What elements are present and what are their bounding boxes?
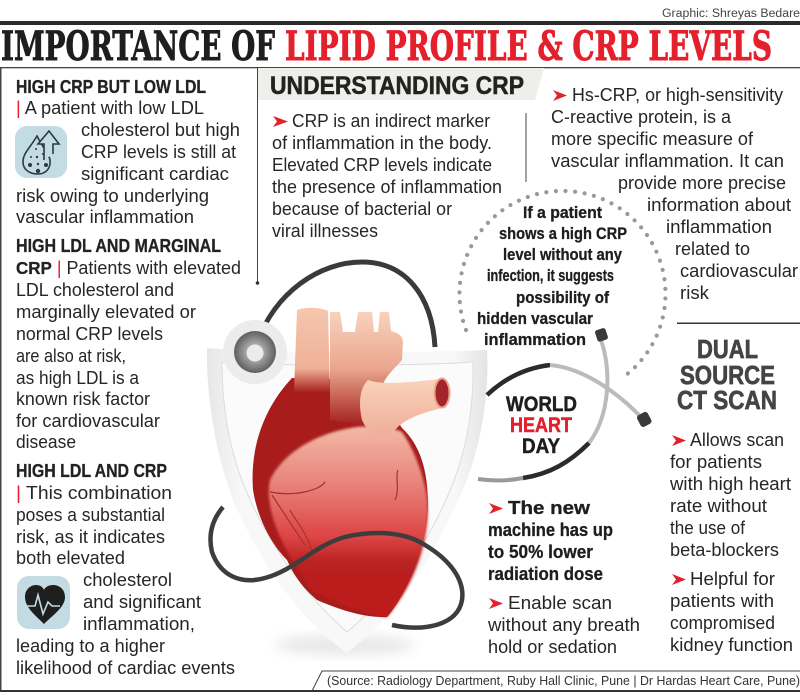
- text block: Hs-CRP: [551, 84, 798, 303]
- text block: high LDL and CRP: leading to a higher: [16, 635, 165, 656]
- text block: CRP marker: of inflammation in the body.: [272, 132, 492, 153]
- shield: [207, 348, 487, 653]
- text block: high LDL and CRP: | This combination: [16, 482, 172, 503]
- text block: benefits: patients with: [670, 590, 774, 611]
- text block: high LDL and CRP: both elevated: [16, 547, 125, 568]
- title: [1, 23, 772, 70]
- shield shadow: [275, 635, 415, 655]
- callout: dotted bubble: [459, 191, 665, 378]
- heading: high LDL and CRP: HIGH LDL AND CRP: [16, 461, 167, 481]
- text block: CRP marker: [272, 110, 502, 241]
- text block: CRP marker: the presence of inflammation: [272, 176, 502, 197]
- heading: SOURCE: [680, 360, 775, 390]
- callout: dotted bubble: infection, it suggests: [487, 267, 614, 285]
- panel: lipid risk scenarios: [15, 77, 241, 678]
- label: World Heart Day: [506, 393, 577, 458]
- icon: blood drop with up arrow: [15, 126, 67, 178]
- text block: benefits: kidney function: [670, 634, 793, 655]
- text block: benefits: rate without: [670, 495, 767, 516]
- text block: Hs-CRP: inflammation: [666, 216, 772, 237]
- text block: new machine: hold or sedation: [488, 636, 617, 657]
- text block: benefits: beta-blockers: [670, 539, 779, 560]
- heading: [677, 334, 777, 415]
- text block: high LDL and marginal CRP: LDL cholesterol and: [16, 279, 174, 300]
- text block: Hs-CRP: vascular inflammation. It can: [551, 150, 784, 171]
- text block: high LDL and CRP: poses a substantial: [16, 504, 165, 525]
- text block: CRP marker: CRP is an indirect marker: [292, 110, 490, 131]
- text block: high CRP but low LDL: vascular inflammation: [16, 206, 194, 227]
- text block: high CRP but low LDL: | A patient with low LDL: [16, 97, 204, 118]
- text block: benefits: for patients: [670, 451, 762, 472]
- text block: CRP marker: Elevated CRP levels indicate: [272, 154, 492, 175]
- text block: new machine: Enable scan: [508, 592, 612, 613]
- text block: high LDL and marginal CRP: normal CRP levels: [16, 323, 163, 344]
- text block: new machine: radiation dose: [488, 563, 603, 584]
- illustration: heart in shield with stethoscope: [207, 262, 653, 655]
- text block: Hs-CRP: more specific measure of: [551, 128, 754, 149]
- text block: Hs-CRP: C-reactive protein, is a: [551, 106, 732, 127]
- label: World Heart Day: WORLD: [506, 393, 577, 416]
- text block: high CRP but low LDL: cholesterol but high: [81, 119, 240, 140]
- text block: high LDL and CRP: inflammation,: [83, 613, 195, 634]
- heart: [253, 308, 450, 617]
- source line: (Source: Radiology Department, Ruby Hall Clinic, Pune | Dr Hardas Heart Care, Pune): [327, 674, 800, 688]
- text block: new machine: The new: [508, 497, 591, 518]
- text block: benefits: Allows scan: [690, 429, 784, 450]
- callout: dotted bubble: If a patient: [523, 204, 602, 222]
- callout: dotted bubble: level without any: [503, 246, 623, 264]
- text block: new machine: to 50% lower: [488, 541, 593, 562]
- text block: high LDL and CRP: risk, as it indicates: [16, 526, 165, 547]
- text block: benefits: compromised: [670, 612, 775, 633]
- text block: high LDL and CRP: [16, 482, 235, 678]
- heading: high LDL and marginal CRP: HIGH LDL AND MARGINAL: [16, 236, 221, 256]
- text block: CRP marker: viral illnesses: [272, 220, 378, 241]
- text block: high LDL and CRP: cholesterol: [83, 569, 172, 590]
- text block: high LDL and marginal CRP: CRP | Patients with elevated: [16, 257, 241, 278]
- panel: dual source CT scan: [669, 334, 793, 655]
- icon: heart with pulse: [17, 576, 70, 629]
- text block: high CRP but low LDL: risk owing to underlying: [16, 185, 209, 206]
- title: IMPORTANCE OF: [1, 23, 275, 70]
- stethoscope chest piece: [223, 320, 287, 384]
- text block: high CRP but low LDL: significant cardiac: [81, 163, 229, 184]
- text block: high CRP but low LDL: [16, 97, 240, 227]
- text block: high LDL and marginal CRP: are also at risk,: [16, 345, 126, 366]
- text block: high LDL and marginal CRP: as high LDL is a: [16, 367, 140, 388]
- heading: DUAL: [697, 334, 758, 364]
- text block: high LDL and marginal CRP: for cardiovascular: [16, 410, 160, 431]
- callout: dotted bubble: possibility of: [516, 289, 609, 307]
- text block: high CRP but low LDL: CRP levels is still at: [81, 141, 236, 162]
- text block: Hs-CRP: Hs-CRP, or high-sensitivity: [572, 84, 784, 105]
- text block: new machine: without any breath: [487, 614, 640, 635]
- text block: benefits: [669, 429, 793, 655]
- heading band: UNDERSTANDING CRP: [270, 72, 524, 100]
- heading: CT SCAN: [677, 385, 777, 415]
- text block: Hs-CRP: information about: [647, 194, 791, 215]
- text block: benefits: with high heart: [669, 473, 791, 494]
- text block: high LDL and marginal CRP: known risk factor: [16, 388, 150, 409]
- credit line: Graphic: Shreyas Bedare: [662, 8, 800, 20]
- text block: Hs-CRP: risk: [680, 282, 710, 303]
- panel: understanding CRP: [258, 68, 798, 378]
- stethoscope tube: upper: [257, 262, 435, 347]
- text block: benefits: the use of: [670, 517, 746, 538]
- text block: high LDL and marginal CRP: [16, 257, 241, 452]
- label: World Heart Day: HEART: [510, 414, 572, 437]
- callout: dotted bubble: inflammation: [484, 331, 586, 349]
- stethoscope tube: lower: [210, 507, 462, 628]
- callout: dotted bubble: hidden vascular: [477, 310, 594, 328]
- callout: dotted bubble: shows a high CRP: [499, 225, 627, 243]
- text block: high LDL and marginal CRP: disease: [16, 431, 76, 452]
- source line: [0, 671, 800, 692]
- text block: CRP marker: because of bacterial or: [272, 198, 452, 219]
- text block: high LDL and CRP: likelihood of cardiac events: [16, 657, 235, 678]
- label: World Heart Day: DAY: [522, 435, 560, 458]
- stethoscope earpieces: [478, 327, 653, 480]
- heading: high CRP but low LDL: HIGH CRP BUT LOW LDL: [16, 77, 206, 97]
- text block: high LDL and marginal CRP: marginally elevated or: [16, 301, 196, 322]
- text block: Hs-CRP: provide more precise: [618, 172, 786, 193]
- text block: high LDL and CRP: and significant: [83, 591, 201, 612]
- text block: Hs-CRP: related to: [675, 238, 750, 259]
- text block: Hs-CRP: cardiovascular: [680, 260, 798, 281]
- text block: benefits: Helpful for: [690, 568, 775, 589]
- top rule: [0, 21, 800, 25]
- text block: new machine: machine has up: [488, 519, 613, 540]
- text block: new machine: [487, 497, 640, 657]
